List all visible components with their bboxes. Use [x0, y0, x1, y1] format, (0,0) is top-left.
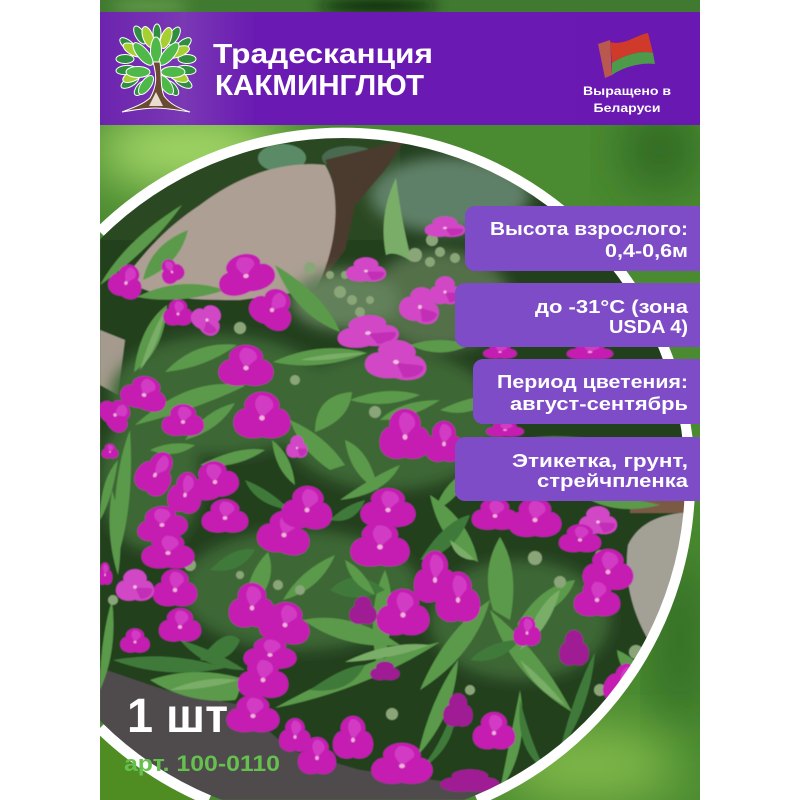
pill: package contents: стрейчпленка — [537, 471, 689, 491]
stone at far left — [100, 330, 125, 395]
pill: bloom period — [473, 359, 700, 424]
rock lower right — [626, 512, 684, 638]
buds — [108, 234, 643, 720]
pill: frost hardiness: USDA 4) — [609, 317, 688, 337]
pill: bloom period: август-сентябрь — [510, 394, 688, 414]
pill: bloom period: Период цветения: — [497, 372, 688, 392]
pill: package contents — [455, 437, 700, 501]
pill: height: Высота взрослого: — [490, 219, 688, 239]
rock shade — [322, 142, 403, 278]
title line 1: Традесканция — [213, 38, 433, 69]
background: blurred green garden — [90, 0, 700, 800]
quantity label: 1 шт — [127, 690, 228, 743]
title — [213, 38, 433, 102]
white circular frame — [100, 133, 690, 800]
pill: frost hardiness — [455, 283, 700, 347]
pill: frost hardiness: до -31°C (зона — [535, 297, 689, 317]
title line 2: КАКМИНГЛЮТ — [215, 70, 424, 102]
tree root arch — [149, 92, 163, 106]
tree trunk — [122, 62, 190, 112]
flag caption: Выращено в — [583, 84, 671, 98]
rock upper left — [125, 164, 337, 300]
mid foliage mottling — [100, 250, 610, 680]
header band — [100, 12, 700, 125]
article number: арт. 100-0110 — [124, 751, 280, 776]
flag caption: Беларуси — [594, 101, 660, 115]
logo: tree — [116, 24, 196, 112]
infographic card — [100, 0, 700, 800]
icon: flag of Belarus — [598, 33, 655, 78]
bark lower left — [100, 668, 500, 800]
leaves — [100, 205, 660, 790]
pill: height — [465, 206, 700, 271]
foliage behind the rock — [100, 130, 530, 240]
pill: package contents: Этикетка, грунт, — [512, 451, 688, 471]
tree crown — [116, 24, 196, 98]
flag caption — [583, 84, 671, 115]
flowers — [94, 216, 643, 792]
pill: height: 0,4-0,6м — [605, 241, 688, 261]
brown soil right — [629, 501, 684, 514]
plant photo — [94, 130, 700, 800]
